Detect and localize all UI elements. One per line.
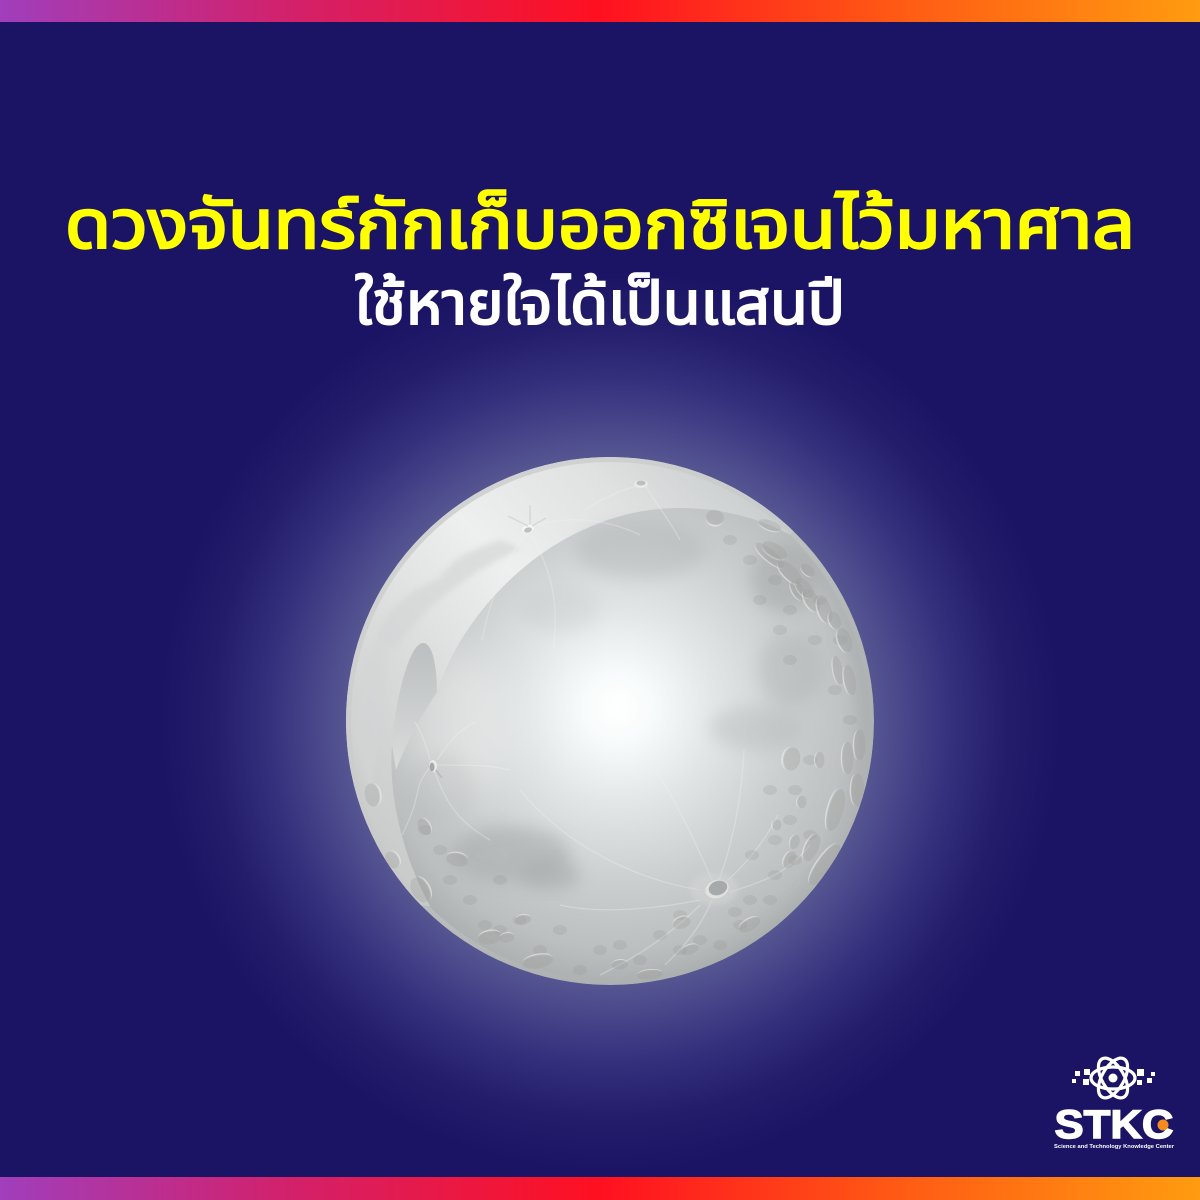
crater: top left rayed <box>508 505 546 534</box>
crater: top <box>634 480 648 488</box>
dark oval <box>392 643 437 770</box>
interior left highlight <box>406 658 492 796</box>
logo caption: Science and Technology Knowledge Center <box>1054 1144 1175 1150</box>
mare: mid right <box>710 708 793 748</box>
illustration: full moon <box>346 457 874 985</box>
subtitle: ใช้หายใจได้เป็นแสนปี <box>355 270 845 337</box>
mare: upper band patch <box>404 540 515 616</box>
crater: bottom right rayed <box>695 878 735 903</box>
logo: STKC <box>1054 1053 1175 1150</box>
crater rays <box>402 485 810 975</box>
logo orange dot <box>1158 1120 1168 1130</box>
light upper-left band <box>346 457 793 906</box>
bottom gradient bar <box>0 1177 1200 1200</box>
mare: lower band patch <box>352 640 388 800</box>
mare: left <box>428 762 467 802</box>
mare: right <box>760 638 816 703</box>
mare: lower left <box>450 827 570 883</box>
title: ดวงจันทร์กักเก็บออกซิเจนไว้มหาศาล <box>65 187 1135 263</box>
logo atom icon <box>1091 1053 1135 1103</box>
mare: upper right <box>751 544 819 612</box>
logo pixel dots <box>1072 1069 1155 1085</box>
highlighted craters right limb <box>363 508 865 981</box>
logo wordmark: STKC <box>1054 1103 1174 1147</box>
mare: lower left small <box>528 862 580 892</box>
dark maria <box>404 526 817 892</box>
mare: top centre <box>580 528 698 577</box>
crater: left rayed <box>429 760 442 778</box>
mare: centre top <box>576 614 577 615</box>
top gradient bar <box>0 0 1200 22</box>
small dark craters <box>418 535 857 975</box>
right limb shade <box>827 586 872 766</box>
moon surface <box>346 457 874 985</box>
rim <box>348 460 872 982</box>
moon glow <box>160 271 1060 1171</box>
